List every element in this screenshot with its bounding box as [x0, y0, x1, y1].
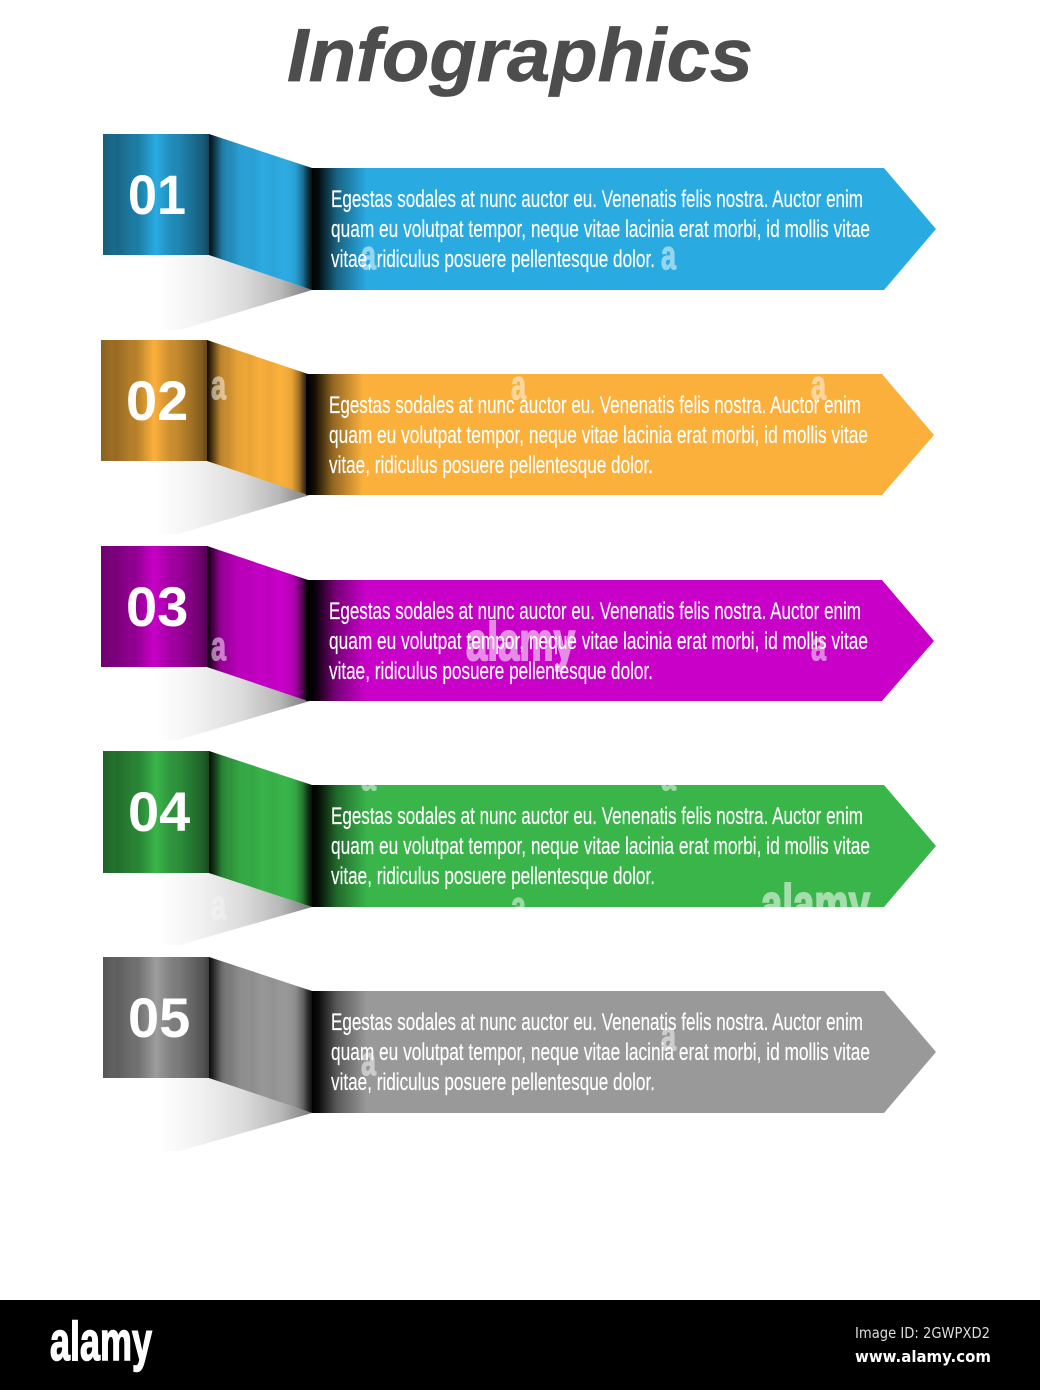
ribbon 03: magenta: 03	[126, 575, 188, 638]
watermarks: a	[211, 882, 227, 928]
watermarks: a	[361, 1038, 377, 1084]
watermarks	[211, 232, 870, 1084]
watermarks: a	[511, 362, 527, 408]
ribbon 05: gray: 05	[128, 986, 190, 1049]
ribbon 04: green	[103, 751, 936, 945]
watermarks: a	[361, 232, 377, 278]
watermarks: a	[661, 753, 677, 799]
ribbon 01: blue	[103, 134, 936, 330]
watermarks: alamy	[761, 874, 870, 934]
footer bar	[0, 1300, 1040, 1390]
ribbon 02: orange: vitae, ridiculus posuere pellentesque dolor.	[329, 452, 653, 479]
ribbon 02: orange	[101, 340, 934, 534]
ribbon 05: gray: vitae, ridiculus posuere pellentesque dolor.	[331, 1069, 655, 1096]
website: www.alamy.com	[855, 1347, 991, 1366]
footer logo: alamy	[50, 1310, 152, 1372]
watermarks: alamy	[466, 612, 575, 672]
watermarks: a	[361, 753, 377, 799]
title: Infographics	[287, 13, 753, 97]
ribbon 02: orange: 02	[126, 369, 188, 432]
ribbon 05: gray	[103, 957, 936, 1151]
image id: Image ID: 2GWPXD2	[855, 1324, 990, 1342]
watermarks: a	[811, 623, 827, 669]
watermarks: a	[511, 883, 527, 929]
watermarks: a	[811, 362, 827, 408]
watermarks: a	[661, 1013, 677, 1059]
ribbon 03: magenta: vitae, ridiculus posuere pellentesque dolor.	[329, 658, 653, 685]
watermarks: a	[211, 362, 227, 408]
ribbon 04: green: 04	[128, 780, 190, 843]
ribbon 04: green: vitae, ridiculus posuere pellentesque dolor.	[331, 863, 655, 890]
ribbon 01: blue: vitae, ridiculus posuere pellentesque dolor.	[331, 246, 655, 273]
watermarks: a	[211, 623, 227, 669]
ribbon 03: magenta	[101, 546, 934, 740]
ribbon 01: blue: 01	[128, 163, 186, 226]
watermarks: a	[661, 232, 677, 278]
